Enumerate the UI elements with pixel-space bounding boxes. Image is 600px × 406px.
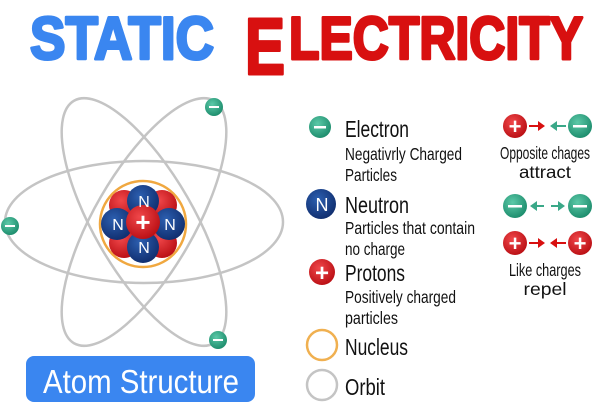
legend: electron: Electron [345, 116, 409, 142]
legend: protons [309, 259, 456, 328]
legend: neutron: Particles that contain [345, 218, 475, 238]
title: E [245, 2, 285, 91]
panel: like charges repel: + [574, 231, 586, 256]
nucleus: N [138, 240, 150, 257]
legend: electron [309, 116, 462, 185]
nucleus: N [112, 217, 124, 234]
nucleus [100, 181, 186, 267]
title: STATIC [30, 5, 214, 72]
legend: electron: Particles [345, 165, 397, 185]
legend: protons: particles [345, 308, 398, 328]
panel: like charges repel: + [509, 231, 521, 256]
nucleus: N [138, 194, 150, 211]
legend: nucleus [307, 330, 408, 360]
legend: neutron: no charge [345, 239, 405, 259]
legend: protons: Protons [345, 260, 405, 286]
legend: protons: Positively charged [345, 287, 456, 307]
legend: protons: + [315, 260, 329, 287]
panel: opposite charges attract [500, 114, 592, 182]
panel: opposite charges attract: + [509, 114, 521, 139]
label: Atom Structure: Atom Structure [43, 363, 239, 400]
panel: like charges repel: repel [524, 279, 566, 299]
legend [306, 116, 475, 400]
title [30, 2, 583, 91]
legend: neutron [306, 189, 475, 259]
legend: orbit: Orbit [345, 374, 385, 400]
atom diagram [1, 76, 283, 368]
legend: orbit [307, 370, 385, 400]
legend: neutron: Neutron [345, 192, 409, 218]
legend: electron: Negativrly Charged [345, 144, 462, 164]
nucleus: + [135, 207, 151, 237]
orbits [5, 76, 283, 368]
nucleus: N [164, 217, 176, 234]
panel: like charges repel [503, 194, 592, 299]
panel: opposite charges attract: attract [519, 162, 571, 182]
legend: neutron: N [316, 195, 328, 215]
electrons [1, 98, 227, 349]
legend: nucleus: Nucleus [345, 334, 408, 360]
